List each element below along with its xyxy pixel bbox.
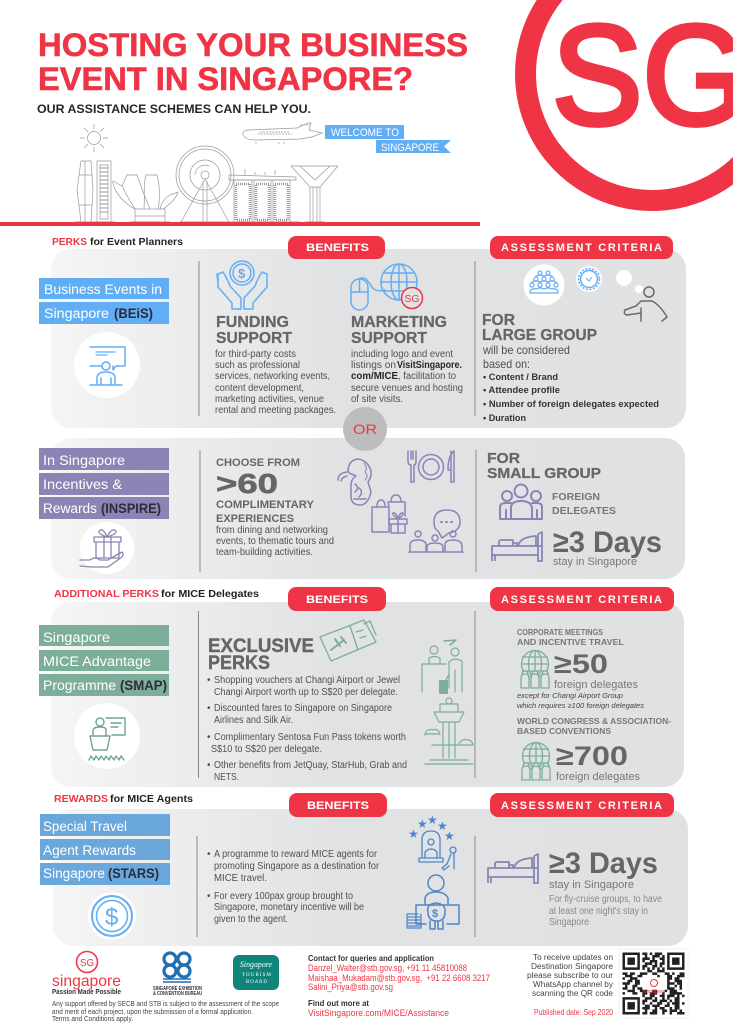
title xyxy=(38,27,468,97)
icon: doorman with stars: ★ xyxy=(408,827,419,841)
banner: welcome to: WELCOME TO xyxy=(331,127,399,139)
QR code xyxy=(619,949,688,1018)
text: contact details: Salini_Priya@stb.gov.sg xyxy=(308,982,393,992)
text: large group criteria xyxy=(482,312,659,424)
icon: merlion xyxy=(338,459,371,505)
text: marketing support: listings on xyxy=(351,360,396,371)
icon: doorman with stars xyxy=(408,813,456,870)
text: exclusive perks heading xyxy=(208,636,314,674)
text: complimentary experiences: COMPLIMENTARY xyxy=(216,499,315,511)
text: disclaimer xyxy=(52,1001,279,1023)
scheme name: INSPIRE: In Singapore xyxy=(43,453,125,468)
text: large group criteria: • Attendee profile xyxy=(483,385,560,396)
text: large group criteria: • Number of foreign delegates expected xyxy=(483,399,659,410)
stat: 700 foreign delegates: ≥700 xyxy=(556,741,628,771)
note: fly-cruise groups: at least one night's stay in xyxy=(549,906,648,917)
stat: 700 foreign delegates: foreign delegates xyxy=(556,771,640,783)
list: exclusive perks: Other benefits from JetQuay, StarHub, Grab and xyxy=(214,760,407,771)
text: contact details xyxy=(308,953,490,992)
icon: agent with money bag: $ xyxy=(432,908,438,920)
section heading: additional perks for MICE delegates xyxy=(54,589,259,600)
text: large group criteria: LARGE GROUP xyxy=(482,327,597,344)
icon: gift on hand xyxy=(80,522,134,574)
note: Changi Airport Group exception xyxy=(517,691,644,710)
scheme name: INSPIRE: (INSPIRE) xyxy=(101,501,161,516)
icon: dollar coin xyxy=(88,892,136,940)
title: HOSTING YOUR BUSINESS xyxy=(38,27,468,63)
text: marketing support: SUPPORT xyxy=(351,330,427,347)
icon: doorman with stars: ★ xyxy=(444,829,455,843)
logo: Singapore Tourism Board: BOARD xyxy=(246,980,267,985)
logo: Singapore Passion Made Possible: Passion Made Possible xyxy=(52,987,121,996)
text: find out more xyxy=(308,998,449,1019)
stat: 50 foreign delegates: foreign delegates xyxy=(554,679,638,691)
scheme name: INSPIRE: Incentives & xyxy=(43,477,122,492)
list: exclusive perks: NETS. xyxy=(214,772,239,783)
icon: mouse, globe and SG badge xyxy=(351,264,422,310)
text: whatsapp subscription: To receive updates on xyxy=(533,953,613,962)
logo: Singapore Tourism Board: Singapore xyxy=(240,960,272,969)
text: funding support xyxy=(215,314,336,416)
text: complimentary experiences: EXPERIENCES xyxy=(216,513,294,525)
scheme name: SMAP xyxy=(39,625,169,696)
badge: or xyxy=(343,407,387,451)
list: exclusive perks: • xyxy=(207,732,211,743)
text: complimentary experiences: from dining and networking xyxy=(216,525,328,536)
text: corporate meetings xyxy=(517,627,624,647)
text: disclaimer: and merit of each project, upon the submission of a formal application. xyxy=(52,1009,253,1016)
text: disclaimer: Terms and Conditions apply. xyxy=(52,1016,133,1023)
badge: benefits: BENEFITS xyxy=(306,594,368,606)
logo: Singapore Exhibition and Convention Bureau xyxy=(153,953,202,997)
scheme name: SMAP: Programme xyxy=(43,678,116,693)
scheme name: STARS: Singapore xyxy=(43,866,105,881)
icon: control tower xyxy=(425,698,473,764)
text: find out more: VisitSingapore.com/MICE/Assistance xyxy=(308,1008,449,1019)
text: funding support: such as professional xyxy=(215,360,300,371)
text: foreign delegates: DELEGATES xyxy=(552,505,616,517)
badge: assessment criteria: ASSESSMENT CRITERIA xyxy=(501,594,662,606)
panel: BEiS xyxy=(51,249,686,428)
text: funding support: services, networking events, xyxy=(215,371,330,382)
icon: doorman with stars: ★ xyxy=(437,819,448,833)
text: complimentary experiences: >60 xyxy=(216,468,278,499)
section heading: rewards for MICE agents: REWARDS xyxy=(54,794,108,805)
icon: globe with delegates xyxy=(521,650,549,688)
text: marketing support: secure venues and hosting xyxy=(351,383,463,394)
panel: SMAP xyxy=(51,602,684,787)
text: published date: Published date: Sep 2020 xyxy=(534,1008,613,1017)
panel: INSPIRE xyxy=(51,438,685,579)
icon: clock badge xyxy=(576,266,602,292)
text: complimentary experiences: events, to thematic tours and xyxy=(216,536,334,547)
stat: three days: stay in Singapore xyxy=(549,879,634,891)
list: exclusive perks: Complimentary Sentosa Fun Pass tokens worth xyxy=(214,732,406,743)
text: disclaimer: Any support offered by SECB and STB is subject to the assessment of the scope xyxy=(52,1001,279,1008)
logo: Singapore Passion Made Possible: singapore xyxy=(52,973,121,990)
logo: Singapore Passion Made Possible xyxy=(52,952,121,996)
scheme name: BEiS: Singapore xyxy=(44,306,109,321)
text: funding support: SUPPORT xyxy=(216,330,292,347)
note: fly-cruise groups: For fly-cruise groups, to have xyxy=(549,894,662,905)
logo: Singapore Exhibition and Convention Bureau: SINGAPORE EXHIBITION xyxy=(153,986,202,992)
icon: speaker with audience xyxy=(74,703,140,769)
scheme name: STARS: Agent Rewards xyxy=(43,843,136,858)
list: STARS benefits: • xyxy=(207,849,211,860)
list: exclusive perks: Shopping vouchers at Changi Airport or Jewel xyxy=(214,675,400,686)
text: whatsapp subscription: scanning the QR code xyxy=(532,989,614,998)
text: marketing support: , facilitation to xyxy=(398,371,456,382)
scheme name: INSPIRE xyxy=(39,448,169,519)
icon: thinking person xyxy=(616,270,667,321)
text: contact details: Danzel_Walter@stb.gov.sg, +91 11 45810088 xyxy=(308,963,467,973)
text: funding support: marketing activities, venue xyxy=(215,394,324,405)
icon: agent with money bag xyxy=(407,875,459,929)
text: find out more: Find out more at xyxy=(308,998,369,1008)
icon: bed xyxy=(488,854,538,883)
icon: presenter with speech bubble xyxy=(74,332,140,398)
badge: benefits xyxy=(288,587,386,611)
badge: benefits: BENEFITS xyxy=(307,800,369,812)
list: STARS benefits: Singapore, monetary incentive will be xyxy=(214,902,364,913)
text: marketing support: including logo and event xyxy=(351,349,453,360)
badge: benefits: BENEFITS xyxy=(306,242,369,254)
section heading: rewards for MICE agents: for MICE Agents xyxy=(110,794,193,805)
scheme name: BEiS xyxy=(39,278,169,324)
list: exclusive perks: • xyxy=(207,760,211,771)
text: funding support: FUNDING xyxy=(216,314,289,331)
icon: people with speech bubble xyxy=(409,510,463,552)
logo: Singapore Tourism Board xyxy=(233,955,279,990)
list: STARS benefits: For every 100pax group brought to xyxy=(214,891,353,902)
text: corporate meetings: AND INCENTIVE TRAVEL xyxy=(517,637,624,647)
scheme name: SMAP: (SMAP) xyxy=(120,678,167,693)
icon: bed xyxy=(492,532,542,561)
text: foreign delegates xyxy=(552,491,616,517)
list: STARS benefits: • xyxy=(207,891,211,902)
list: STARS benefits: given to the agent. xyxy=(214,914,288,925)
logo: Singapore Tourism Board: TOURISM xyxy=(242,973,272,978)
scheme name: SMAP: MICE Advantage xyxy=(43,654,151,669)
scheme name: SMAP: Singapore xyxy=(43,630,110,645)
badge: assessment criteria xyxy=(490,793,674,817)
icon: plate and cutlery xyxy=(408,451,454,482)
list: exclusive perks: Changi Airport worth up to S$20 per delegate. xyxy=(214,687,398,698)
stat: three days: ≥3 Days xyxy=(553,526,662,559)
icon: hands holding coin xyxy=(217,261,267,309)
section heading: perks for event planners: PERKS xyxy=(52,237,87,248)
stat: three days: ≥3 Days xyxy=(549,847,658,880)
note: Changi Airport Group exception: except for Changi Airport Group xyxy=(517,691,623,700)
section heading: additional perks for MICE delegates: ADDITIONAL PERKS xyxy=(54,589,159,600)
text: complimentary experiences: team-building activities. xyxy=(216,547,313,558)
text: large group criteria: • Content / Brand xyxy=(483,372,558,383)
text: corporate meetings: CORPORATE MEETINGS xyxy=(517,627,603,637)
text: world congress: BASED CONVENTIONS xyxy=(517,726,611,736)
text: world congress: WORLD CONGRESS & ASSOCIATION- xyxy=(517,716,671,726)
stat: three days: stay in Singapore xyxy=(553,556,637,568)
title: EVENT IN SINGAPORE? xyxy=(38,61,413,97)
list: STARS benefits xyxy=(207,849,380,925)
scheme name: STARS xyxy=(40,814,170,885)
text: whatsapp subscription xyxy=(527,953,614,998)
note: fly-cruise groups: Singapore xyxy=(549,917,589,928)
illustration: Singapore skyline xyxy=(75,123,338,222)
panel: STARS xyxy=(53,809,688,946)
icon: doorman with stars: ★ xyxy=(427,813,438,827)
badge: benefits xyxy=(289,793,387,817)
note: fly-cruise groups xyxy=(549,894,662,928)
text: foreign delegates: FOREIGN xyxy=(552,491,600,503)
stat: 700 foreign delegates xyxy=(556,741,640,783)
icon: doorman with stars: ★ xyxy=(417,817,428,831)
list: STARS benefits: MICE travel. xyxy=(214,873,267,884)
text: marketing support: of site visits. xyxy=(351,394,403,405)
badge: assessment criteria xyxy=(490,236,673,259)
text: funding support: rental and meeting packages. xyxy=(215,405,336,416)
icon: hands holding coin: $ xyxy=(238,266,246,281)
list: exclusive perks: S$10 to S$20 per delegate. xyxy=(211,744,322,755)
text: contact details: Contact for queries and application xyxy=(308,953,434,963)
logo: Singapore Passion Made Possible: SG xyxy=(80,958,94,969)
icon: shopping bags and gift xyxy=(372,495,407,533)
section heading: perks for event planners: for Event Planners xyxy=(90,237,183,248)
subtitle: OUR ASSISTANCE SCHEMES CAN HELP YOU. xyxy=(37,104,311,116)
text: large group criteria: FOR xyxy=(482,312,515,329)
icon: mouse, globe and SG badge: SG xyxy=(404,293,420,305)
icon: airline tickets xyxy=(320,620,376,661)
text: contact details: Maishaa_Mukadam@stb.gov.sg, +91 22 6608 3217 xyxy=(308,973,490,983)
note: Changi Airport Group exception: which requires ≥100 foreign delegates xyxy=(517,701,644,710)
logo: large SG ring xyxy=(526,0,733,200)
stat: 50 foreign delegates xyxy=(554,649,638,691)
badge: or: OR xyxy=(353,421,377,437)
list: STARS benefits: A programme to reward MICE agents for xyxy=(214,849,378,860)
banner: singapore: SINGAPORE xyxy=(381,142,439,154)
icon: audience in circle xyxy=(524,264,564,306)
icon: three delegates xyxy=(500,484,542,519)
scheme name: BEiS: Business Events in xyxy=(44,282,162,297)
text: large group criteria: will be considered xyxy=(482,343,570,357)
text: exclusive perks heading: EXCLUSIVE xyxy=(208,636,314,657)
text: funding support: for third-party costs xyxy=(215,349,296,360)
text: large group criteria: based on: xyxy=(483,357,530,371)
stat: 50 foreign delegates: ≥50 xyxy=(554,649,608,679)
icon: check-in counter xyxy=(422,640,462,694)
badge: assessment criteria: ASSESSMENT CRITERIA xyxy=(501,242,662,254)
section heading: additional perks for MICE delegates: for MICE Delegates xyxy=(161,589,259,600)
section heading: rewards for MICE agents xyxy=(54,794,193,805)
text: small group heading xyxy=(487,450,601,482)
scheme name: STARS: (STARS) xyxy=(108,866,159,881)
list: exclusive perks: • xyxy=(207,675,211,686)
list: exclusive perks: Discounted fares to Singapore on Singapore xyxy=(214,703,392,714)
QR code: singapore xyxy=(643,989,665,995)
text: small group heading: FOR xyxy=(487,450,520,467)
text: whatsapp subscription: please subscribe to our xyxy=(527,971,613,980)
text: marketing support: VisitSingapore. xyxy=(397,360,462,371)
list: exclusive perks: Airlines and Silk Air. xyxy=(214,715,293,726)
badge: assessment criteria xyxy=(490,587,674,611)
scheme name: STARS: Special Travel xyxy=(43,819,127,834)
scheme name: INSPIRE: Rewards xyxy=(43,501,97,516)
list: STARS benefits: promoting Singapore as a destination for xyxy=(214,861,380,872)
badge: assessment criteria: ASSESSMENT CRITERIA xyxy=(501,800,662,812)
scheme name: BEiS: (BEiS) xyxy=(114,306,153,321)
text: small group heading: SMALL GROUP xyxy=(487,465,601,482)
text: whatsapp subscription: WhatsApp channel by xyxy=(533,980,613,989)
text: marketing support xyxy=(351,314,463,405)
icon: globe with delegates xyxy=(522,742,550,780)
text: whatsapp subscription: Destination Singapore xyxy=(531,962,614,971)
text: complimentary experiences xyxy=(216,457,334,558)
logo: Singapore Exhibition and Convention Bureau: & CONVENTION BUREAU xyxy=(153,991,202,997)
badge: benefits xyxy=(288,236,385,259)
text: large group criteria: • Duration xyxy=(483,413,526,424)
text: world congress xyxy=(517,716,671,736)
text: marketing support: MARKETING xyxy=(351,314,447,331)
text: marketing support: com/MICE xyxy=(351,371,398,382)
icon: dollar coin: $ xyxy=(105,904,118,931)
text: exclusive perks heading: PERKS xyxy=(208,653,270,674)
text: funding support: content development, xyxy=(215,383,304,394)
section heading: perks for event planners xyxy=(52,237,183,248)
text: complimentary experiences: CHOOSE FROM xyxy=(216,457,300,469)
list: exclusive perks: • xyxy=(207,703,211,714)
list: exclusive perks xyxy=(207,675,407,783)
